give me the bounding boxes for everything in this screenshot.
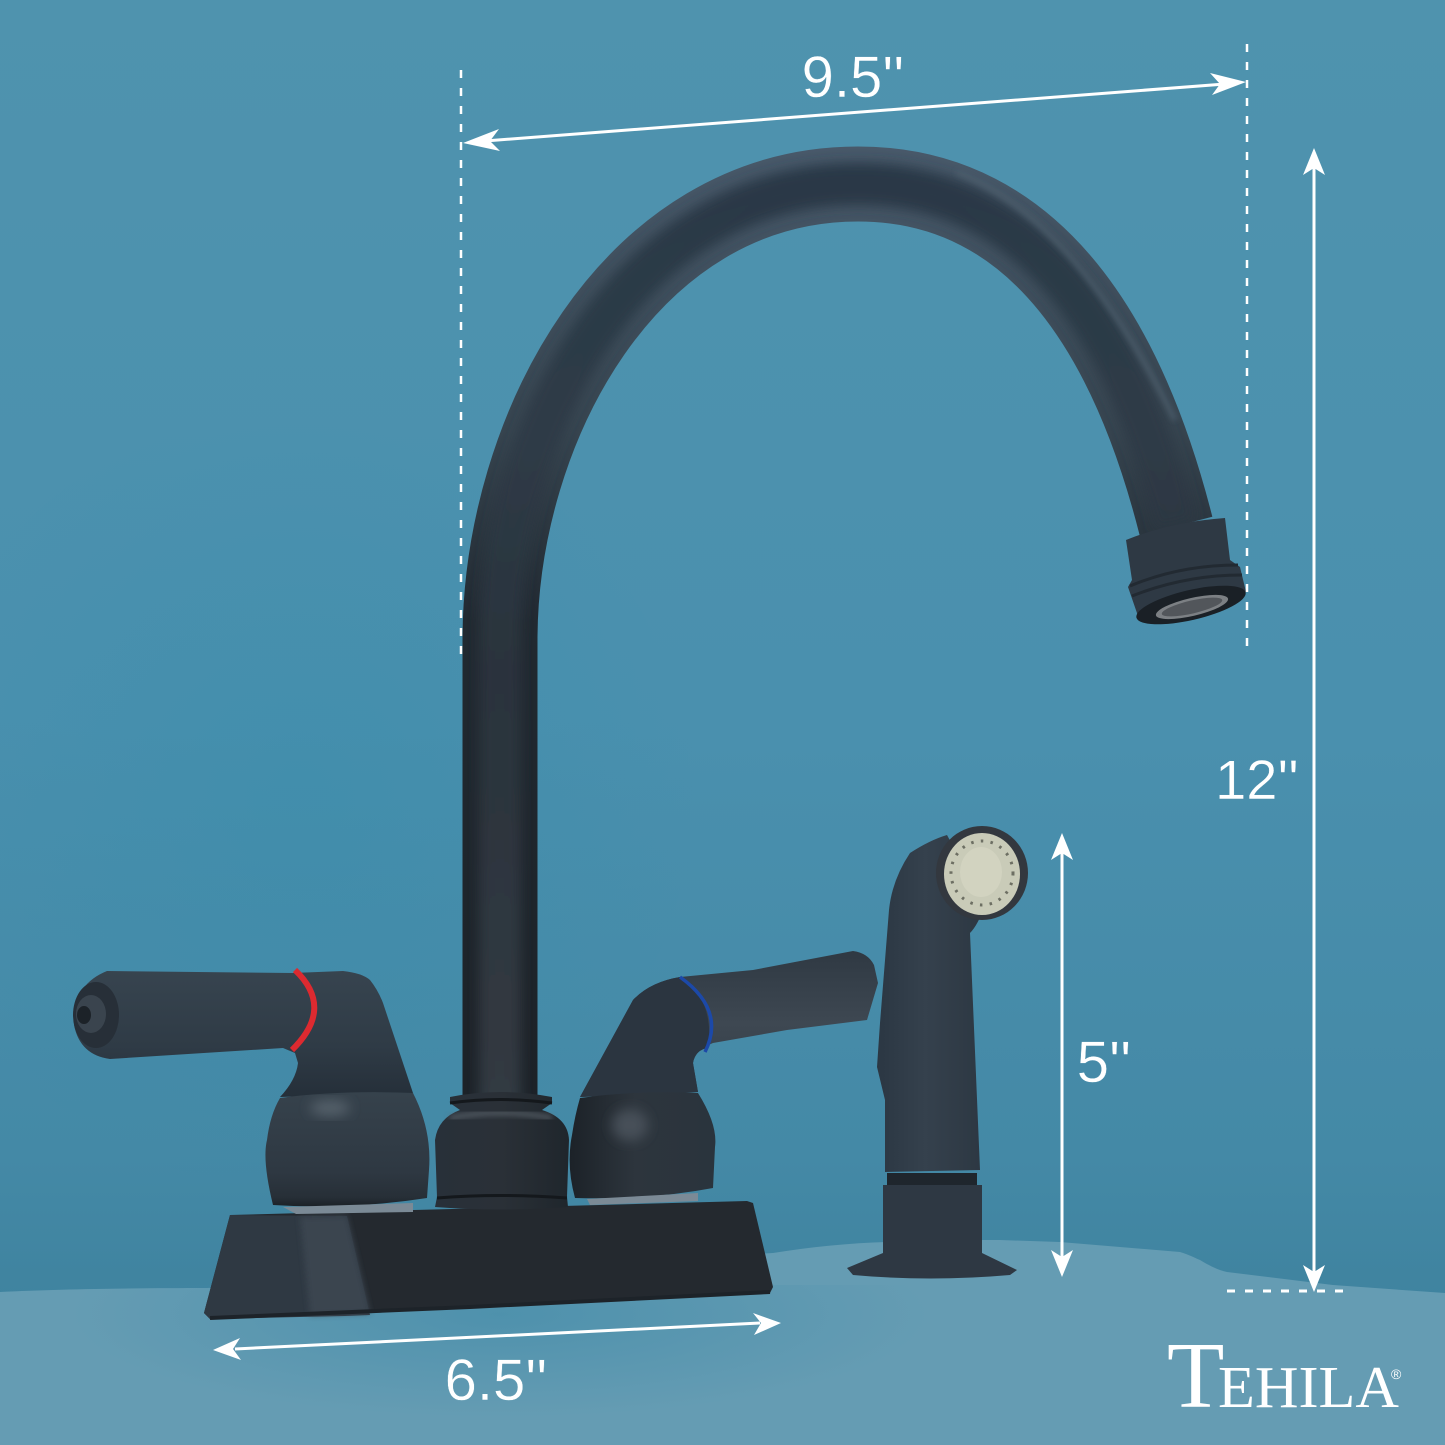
side sprayer xyxy=(847,826,1028,1278)
dimension: 9.5 width xyxy=(461,44,1247,660)
hot lever arm xyxy=(74,971,413,1097)
sprayer base xyxy=(847,1185,1017,1278)
logo: Tehila: ® xyxy=(1391,1366,1402,1382)
dimension: 5 sprayer height: 5'' xyxy=(1077,1030,1131,1095)
sprayer ring xyxy=(887,1173,977,1185)
counter surface xyxy=(0,1240,1445,1445)
dimension: 12 height: 12'' xyxy=(1215,748,1299,811)
cold dome xyxy=(570,1092,715,1198)
cold washer xyxy=(587,1193,698,1205)
spout collar xyxy=(1126,518,1246,616)
deck plate xyxy=(204,1201,773,1319)
dimension: 9.5 width: 9.5'' xyxy=(802,45,904,110)
faucet xyxy=(73,172,1249,1319)
hot handle tip xyxy=(73,982,119,1048)
left hot handle xyxy=(73,970,429,1214)
logo: Tehila: EHILA xyxy=(1218,1354,1399,1420)
sprayer body xyxy=(877,835,985,1172)
aerator xyxy=(1133,578,1249,632)
logo: Tehila xyxy=(1167,1324,1402,1428)
red ring xyxy=(292,970,314,1050)
logo: Tehila: T xyxy=(1167,1324,1224,1428)
cold lever arm xyxy=(580,951,878,1097)
dimension: 12 height xyxy=(1215,148,1344,1292)
gooseneck spout xyxy=(500,172,1249,1110)
right cold handle xyxy=(570,951,878,1205)
center collar xyxy=(435,1092,569,1210)
dimension: 6.5 base width xyxy=(213,1313,781,1413)
hot dome xyxy=(265,1092,429,1206)
hot washer xyxy=(283,1203,413,1214)
dimension: 5 sprayer height xyxy=(1051,833,1131,1277)
dimension: 6.5 base width: 6.5'' xyxy=(445,1348,547,1413)
blue ring xyxy=(680,977,712,1052)
sprayer head xyxy=(936,826,1028,920)
